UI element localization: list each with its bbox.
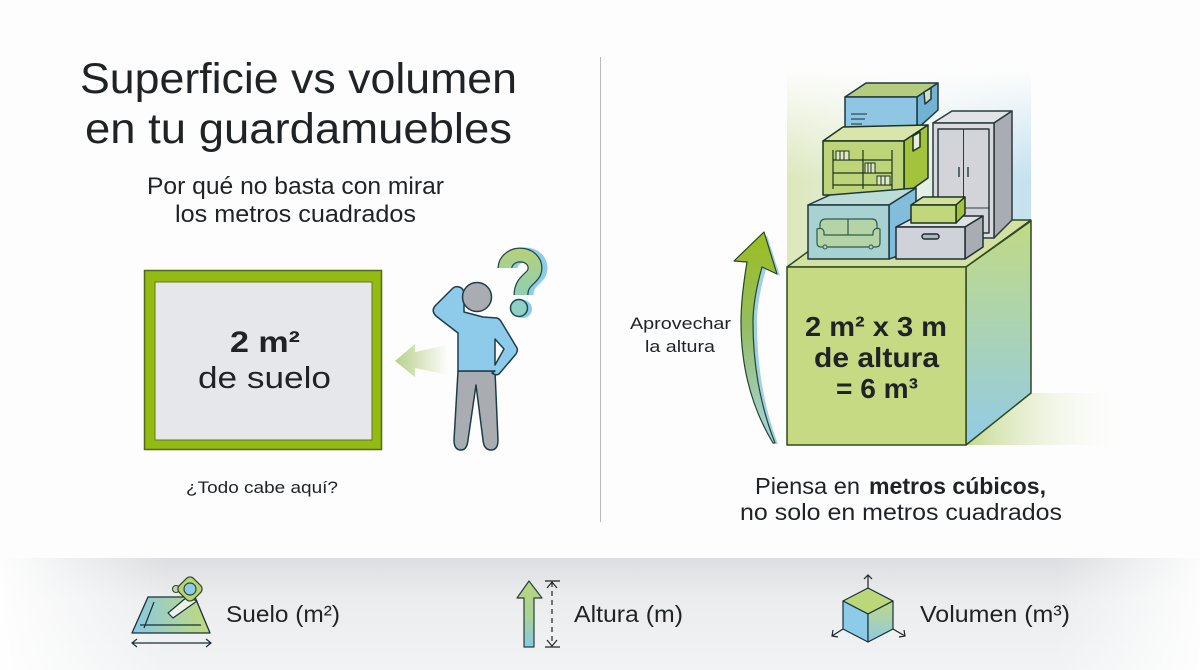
takeaway text: no solo en metros cuadrados: [740, 499, 1062, 525]
panel: floor square: de suelo: [198, 360, 331, 395]
arrow: pale pointing to floor: [395, 344, 448, 377]
icon: blue box: [845, 83, 938, 129]
title: [80, 55, 517, 153]
legend: height: [517, 581, 683, 647]
volume formula: de altura: [814, 342, 939, 373]
label: use the height: la altura: [645, 337, 716, 356]
title: en tu guardamuebles: [85, 105, 512, 153]
arrow: rising height: [734, 232, 780, 444]
takeaway text: Piensa en: [755, 473, 860, 499]
subtitle: Por qué no basta con mirar: [147, 173, 444, 200]
title: Superficie vs volumen: [80, 55, 517, 103]
icon: green box with shelf: [823, 125, 928, 195]
subtitle: los metros cuadrados: [175, 201, 416, 228]
volume formula: = 6 m³: [836, 373, 918, 404]
panel: floor square: 2 m²: [230, 326, 300, 359]
subtitle: [147, 173, 444, 228]
legend: volume: Volumen (m³): [920, 601, 1070, 627]
legend: floor: Suelo (m²): [226, 601, 340, 627]
caption: does it all fit: ¿Todo cabe aquí?: [186, 478, 338, 497]
icon: person thinking: [433, 282, 517, 450]
takeaway text: [740, 473, 1062, 525]
cube: storage volume: [787, 220, 1031, 445]
panel: volume illustration: [787, 70, 1125, 445]
panel: floor square: [144, 270, 382, 450]
label: use the height: Aprovechar: [630, 314, 731, 333]
takeaway text: metros cúbicos,: [869, 473, 1046, 499]
label: use the height: [630, 314, 731, 356]
volume formula: [805, 311, 947, 404]
legend: floor: [132, 575, 340, 647]
icon: grey drawer box: [896, 216, 983, 259]
icon: question mark: [505, 255, 540, 318]
icon: wardrobe: [933, 111, 1012, 238]
panel: legend band: [0, 558, 1200, 670]
icon: small green box: [911, 197, 965, 223]
volume formula: 2 m² x 3 m: [805, 311, 947, 342]
legend: height: Altura (m): [574, 601, 683, 627]
legend: volume: [832, 575, 1070, 642]
icon: sofa box: [808, 188, 916, 259]
